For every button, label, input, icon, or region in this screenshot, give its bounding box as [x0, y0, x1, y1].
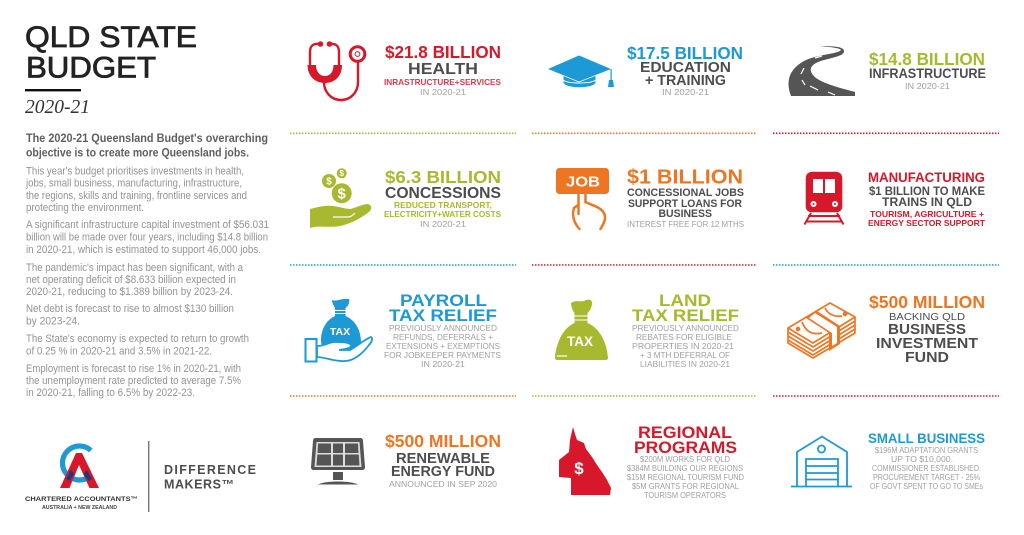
heading: category: FUND: [905, 349, 949, 366]
logo: Chartered Accountants: DIFFERENCE: [164, 463, 256, 477]
panel: education: [547, 43, 743, 97]
panel: small business: [791, 431, 985, 491]
heading: category: [640, 60, 731, 89]
text: year: IN 2020-21: [662, 88, 710, 97]
text block: overview: protecting the environment.: [26, 202, 144, 214]
icon: graduation cap: [547, 55, 614, 87]
heading: amount: $21.8 BILLION: [385, 42, 501, 62]
panel: infrastructure: [789, 46, 986, 96]
panel: renewable energy: [311, 431, 501, 489]
text: detail: OF GOVT SPENT TO GO TO SMEs: [870, 482, 983, 491]
heading: category: RENEWABLE: [396, 451, 490, 467]
heading: title: PAYROLL: [400, 291, 487, 310]
icon: train: [804, 172, 844, 224]
text: detail: IN 2020-21: [421, 359, 465, 369]
text: detail: ELECTRICITY+WATER COSTS: [384, 209, 501, 219]
heading: category: INVESTMENT: [876, 335, 978, 352]
heading: category: HEALTH: [408, 61, 478, 78]
heading: category: [391, 451, 495, 480]
text block: overview: the regions, skills and training, frontline services and: [26, 190, 247, 202]
title: QLD STATE: [25, 21, 197, 54]
text: backing: BACKING QLD: [889, 311, 965, 323]
heading: title: [632, 291, 739, 325]
text block: overview: 2020-21, reducing to $1.389 billion by 2023-24.: [26, 286, 233, 298]
text: category: BUSINESS: [658, 208, 712, 220]
text block: overview: A significant infrastructure capital investment of $56.031: [26, 219, 269, 231]
logo: Chartered Accountants: MAKERS™: [164, 478, 234, 492]
text: year: IN 2020-21: [420, 88, 467, 97]
text: detail: [384, 200, 501, 219]
heading: category: + TRAINING: [645, 73, 726, 89]
text block: overview: the unemployment rate predicted to average 7.5%: [26, 375, 242, 387]
text block: overview: objective is to create more Queensland jobs.: [26, 148, 249, 160]
text: detail: [384, 323, 501, 369]
text: detail: FOR JOBKEEPER PAYMENTS: [384, 350, 501, 360]
text: category: SUPPORT LOANS FOR: [628, 198, 742, 210]
text: detail: UP TO $10,000.: [891, 455, 953, 464]
text: detail: COMMISSIONER ESTABLISHED.: [872, 464, 981, 473]
text: category: TRAINS IN QLD: [882, 197, 972, 209]
heading: title: TAX RELIEF: [389, 306, 497, 325]
text: year: IN 2020-21: [420, 220, 467, 229]
heading: category: EDUCATION: [640, 60, 731, 76]
text: detail: + 3 MTH DEFERRAL OF: [640, 350, 730, 360]
text: category: [869, 186, 985, 209]
heading: title: PROGRAMS: [634, 438, 737, 457]
icon: stethoscope: [308, 41, 365, 100]
text: category: CONCESSIONAL JOBS: [627, 187, 744, 199]
text: detail: TOURISM, AGRICULTURE +: [870, 209, 984, 219]
panel: manufacturing: [804, 170, 986, 228]
panel: health: [308, 41, 501, 100]
text: detail: [870, 446, 983, 491]
text: detail: EXTENSIONS + EXEMPTIONS: [386, 341, 500, 351]
text: detail: LIABILITIES IN 2020-21: [640, 359, 730, 369]
heading: category: CONCESSIONS: [385, 185, 501, 202]
text block: overview: Employment is forecast to rise 1% in 2020-21, with: [26, 363, 241, 375]
panel: concessions: [310, 167, 501, 229]
text block: overview: of 0.25 % in 2020-21 and 3.5% in 2021-22.: [26, 346, 212, 358]
text: detail: REFUNDS, DEFERRALS +: [393, 332, 493, 342]
text block: overview: The pandemic's impact has been significant, with a: [26, 262, 243, 274]
icon: Queensland map: [559, 427, 611, 495]
title: BUDGET: [26, 52, 156, 84]
icon: hand with coins: $: [338, 186, 347, 202]
text block: overview: by 2023-24.: [26, 316, 80, 328]
heading: amount: $500 MILLION: [385, 431, 501, 451]
heading: amount: $1 BILLION: [627, 166, 743, 188]
text block: overview: The 2020-21 Queensland Budget's overarching: [26, 133, 268, 145]
text block: overview: This year's budget prioritises investments in health,: [26, 166, 244, 178]
text: detail: [868, 209, 986, 228]
panel: payroll tax relief: [306, 291, 501, 369]
text: detail: ENERGY SECTOR SUPPORT: [868, 218, 986, 228]
text: detail: PROPERTIES IN 2020-21: [632, 341, 734, 351]
icon: tax bag in hand: [306, 299, 372, 362]
icon: tax bag in hand: TAX: [330, 326, 350, 338]
text block: overview: Net debt is forecast to rise to almost $130 billion: [26, 303, 234, 315]
text: detail: TOURISM OPERATORS: [644, 490, 726, 500]
icon: Queensland map: $: [574, 459, 584, 478]
panel: jobs support loans: [556, 166, 744, 229]
text: detail: [632, 323, 739, 369]
text: detail: PREVIOUSLY ANNOUNCED: [389, 323, 497, 333]
icon: garage: [791, 436, 852, 486]
text: detail: $5M GRANTS FOR REGIONAL: [632, 481, 739, 491]
heading: title: TAX RELIEF: [632, 306, 739, 325]
text: detail: ANNOUNCED IN SEP 2020: [389, 479, 497, 489]
icon: tax bag: [555, 300, 608, 360]
panel: land tax relief: [555, 291, 739, 369]
text: detail: REDUCED TRANSPORT,: [394, 200, 492, 210]
text: detail: PREVIOUSLY ANNOUNCED: [632, 323, 739, 333]
title: 2020-21: [25, 96, 90, 118]
text: detail: [627, 454, 744, 500]
text block: overview: in 2020-21, which is estimated to support 46,000 jobs.: [26, 244, 261, 256]
text block: overview: jobs, small business, manufacturing, infrastructure,: [25, 178, 242, 190]
icon: hand with coins: $: [339, 169, 344, 178]
icon: road: [789, 46, 855, 96]
heading: title: LAND: [659, 291, 711, 310]
text: year: IN 2020-21: [905, 82, 951, 91]
icon: job button: [556, 168, 609, 229]
text block: overview: [25, 133, 269, 399]
heading: category: BUSINESS: [888, 321, 966, 338]
panel: regional programs: [559, 423, 744, 500]
heading: sector: MANUFACTURING: [868, 170, 985, 185]
heading: amount: $14.8 BILLION: [869, 49, 985, 69]
icon: hand with coins: $: [326, 176, 332, 188]
heading: category: INFRASTRUCTURE: [869, 66, 986, 81]
heading: title: REGIONAL: [638, 423, 732, 442]
heading: category: [876, 321, 978, 366]
icon: money stack: [788, 303, 855, 358]
text block: overview: The State's economy is expected to return to growth: [26, 333, 249, 345]
title: [25, 21, 197, 118]
text: category: $1 BILLION TO MAKE: [869, 186, 985, 198]
heading: amount: $6.3 BILLION: [385, 167, 501, 187]
text: detail: $196M ADAPTATION GRANTS: [875, 446, 978, 455]
text: detail: $384M BUILDING OUR REGIONS: [627, 463, 743, 473]
text block: overview: net operating deficit of $8.633 billion expected in: [26, 274, 236, 286]
text: detail: REBATES FOR ELIGIBLE: [636, 332, 732, 342]
icon: hand with coins: [310, 168, 371, 228]
logo: Chartered Accountants: [25, 441, 256, 512]
text block: overview: billion will be made over four years, including $14.8 billion: [26, 232, 268, 244]
icon: solar panel: [311, 438, 365, 484]
heading: amount: $17.5 BILLION: [627, 43, 743, 63]
text: detail: INTEREST FREE FOR 12 MTHS: [627, 219, 744, 229]
heading: title: SMALL BUSINESS: [868, 431, 985, 446]
text: category: [627, 187, 744, 220]
icon: tax bag: TAX: [567, 334, 593, 349]
panel: business investment fund: [788, 292, 985, 366]
text block: overview: in 2020-21, falling to 6.5% by 2022-23.: [26, 387, 195, 399]
logo: Chartered Accountants: CHARTERED ACCOUNTANTS™: [25, 496, 138, 503]
heading: title: [389, 291, 497, 325]
heading: category: ENERGY FUND: [391, 464, 495, 480]
heading: amount: $500 MILLION: [869, 292, 985, 312]
heading: title: [634, 423, 737, 457]
text: detail: $15M REGIONAL TOURISM FUND: [627, 472, 744, 482]
text: detail: INRASTRUCTURE+SERVICES: [384, 77, 501, 87]
icon: job button: JOB: [566, 174, 600, 190]
text: detail: PROCUREMENT TARGET - 25%: [873, 473, 980, 482]
text: detail: $200M WORKS FOR QLD: [640, 454, 730, 464]
logo: Chartered Accountants: AUSTRALIA + NEW ZEALAND: [42, 505, 117, 511]
